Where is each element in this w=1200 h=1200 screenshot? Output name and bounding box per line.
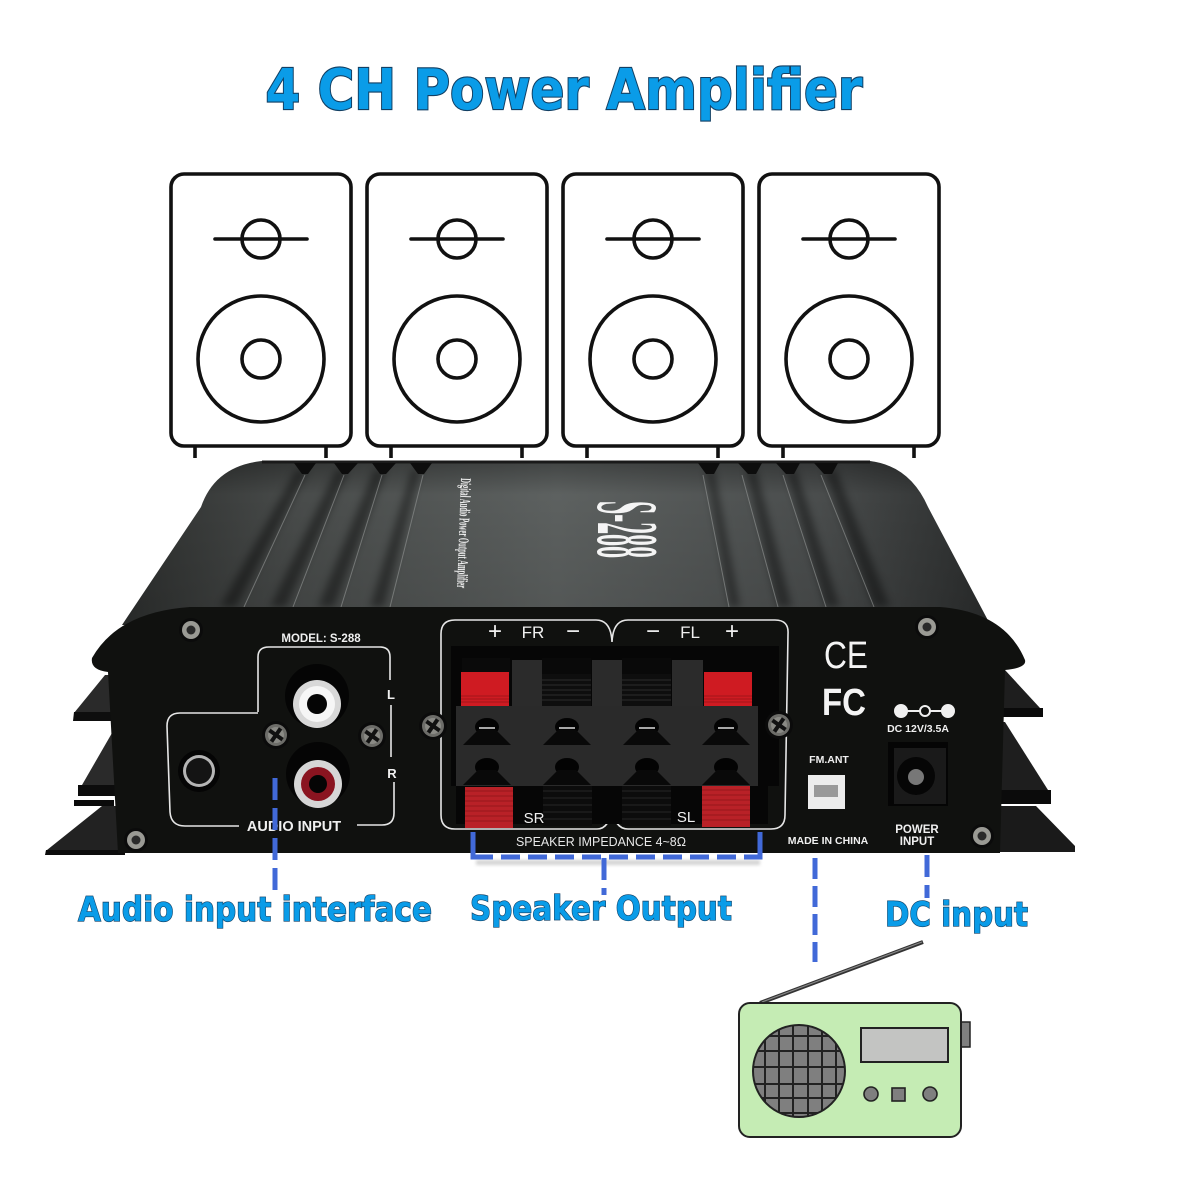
- icon: speaker SR: [367, 174, 547, 458]
- text: R channel: R: [387, 766, 397, 781]
- arrow: audio input leader: [272, 778, 278, 890]
- channel labels: −: [646, 618, 660, 645]
- channel labels: −: [566, 618, 580, 645]
- channel labels: SL: [677, 809, 695, 826]
- amplifier: [45, 461, 1075, 865]
- text: FM antenna: FM.ANT: [809, 754, 849, 766]
- channel labels: +: [488, 618, 502, 645]
- arrow: DC leader: [924, 855, 930, 898]
- RCA red jack: [286, 742, 350, 808]
- channel labels: FL: [680, 623, 700, 642]
- audio input frame: [167, 647, 394, 826]
- text: L channel: L: [387, 687, 395, 702]
- text: model: MODEL: S-288: [281, 633, 361, 645]
- FM connector: [808, 775, 845, 809]
- icon: speaker FR: [171, 174, 351, 458]
- terminal block: [451, 646, 779, 826]
- RCA white jack: [285, 664, 349, 728]
- text: DC rating: DC 12V/3.5A: [887, 723, 949, 735]
- speaker terminal frame: [441, 620, 788, 829]
- icon: speaker FL: [563, 174, 743, 458]
- heat sink fins: [45, 670, 1075, 855]
- channel labels: FR: [522, 623, 544, 642]
- icon: speaker SL: [759, 174, 939, 458]
- channel labels: +: [725, 618, 739, 645]
- text: power input: POWER: [895, 824, 939, 836]
- amplifier top panel: [122, 461, 992, 628]
- DC polarity symbol: [895, 705, 954, 717]
- arrow: speaker output bracket: [473, 832, 760, 857]
- title: 4 CH Power Amplifier: [266, 58, 863, 123]
- headphone jack: [178, 750, 220, 792]
- text: input: INPUT: [900, 836, 934, 848]
- DC socket: [888, 742, 948, 806]
- label: DC input: DC input: [885, 895, 1028, 935]
- FCC mark: FC: [822, 682, 866, 724]
- channel labels: [488, 618, 739, 827]
- arrow: speaker output leader: [602, 858, 606, 895]
- text: made in china: MADE IN CHINA: [788, 835, 869, 847]
- text: impedance: SPEAKER IMPEDANCE 4~8Ω: [516, 835, 686, 849]
- CE mark: CE: [824, 635, 868, 677]
- cast shadow: [476, 860, 760, 865]
- speakers row: [171, 174, 939, 458]
- arrow: FM leader: [812, 858, 818, 962]
- red terminals: [461, 672, 752, 828]
- input screws: [262, 721, 386, 750]
- amplifier top panel: S-288: [578, 501, 675, 558]
- label: audio input: Audio input interface: [78, 890, 432, 930]
- terminal screws: [419, 711, 793, 740]
- case screws: [124, 615, 994, 852]
- icon: radio: [739, 942, 970, 1137]
- amplifier top panel: Digital Audio Power Output Amplifier: [453, 478, 473, 588]
- front panel: [92, 607, 1025, 853]
- label: speaker output: Speaker Output: [470, 889, 732, 929]
- channel labels: SR: [524, 810, 545, 827]
- text: audio input: AUDIO INPUT: [247, 819, 341, 835]
